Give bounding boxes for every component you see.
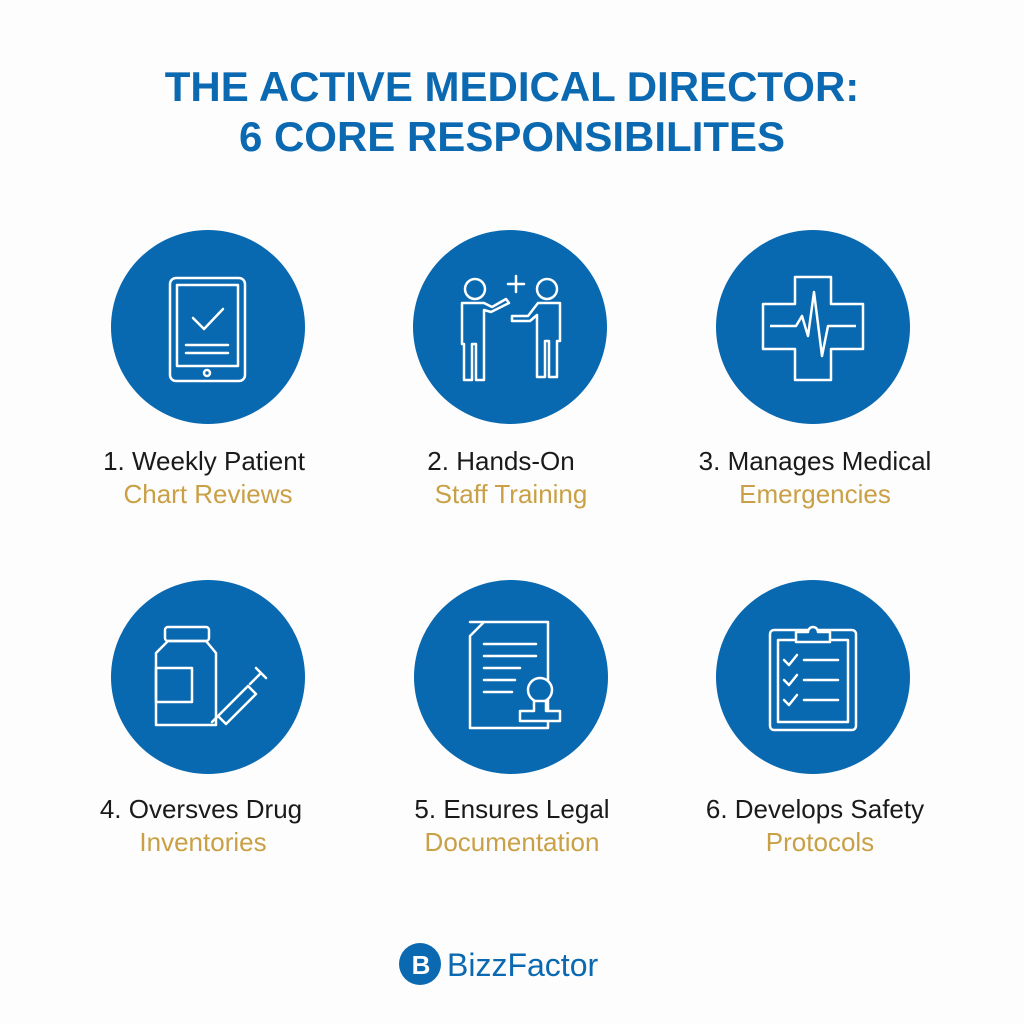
panel: 6 safety protocols: Protocols: [766, 827, 874, 857]
panel: 6 safety protocols: [706, 580, 924, 857]
label: 3. Manages Medical: [699, 446, 931, 476]
panel: 5 legal documentation: [414, 580, 610, 857]
logo: [399, 943, 598, 985]
panel: 2 staff training: Staff Training: [435, 479, 587, 509]
panel: 4 drug inventories: [100, 580, 305, 857]
panel: 4 drug inventories: Inventories: [139, 827, 267, 857]
title: 6 CORE RESPONSIBILITES: [239, 113, 785, 160]
icon: clipboard: [716, 580, 910, 774]
icon: bottle and syringe: [111, 580, 305, 774]
logo: BizzFactor: [447, 947, 598, 983]
panel: 1 chart reviews: Chart Reviews: [123, 479, 293, 509]
label: 4. Oversves Drug: [100, 794, 302, 824]
title: THE ACTIVE MEDICAL DIRECTOR:: [165, 63, 859, 110]
icon: document and stamp: [414, 580, 608, 774]
panel: 2 staff training: [413, 230, 607, 509]
icon: people: [413, 230, 607, 424]
label: 1. Weekly Patient: [103, 446, 306, 476]
title: [165, 63, 859, 160]
panel: 5 legal documentation: Documentation: [425, 827, 599, 857]
panel: 1 chart reviews: [103, 230, 306, 509]
label: 6. Develops Safety: [706, 794, 924, 824]
label: 2. Hands-On: [427, 446, 575, 476]
icon: tablet: [111, 230, 305, 424]
label: 5. Ensures Legal: [414, 794, 610, 824]
panel: 3 emergencies: Emergencies: [739, 479, 891, 509]
panel: 3 emergencies: [699, 230, 931, 509]
icon: cross with pulse: [716, 230, 910, 424]
logo: B: [412, 950, 430, 980]
